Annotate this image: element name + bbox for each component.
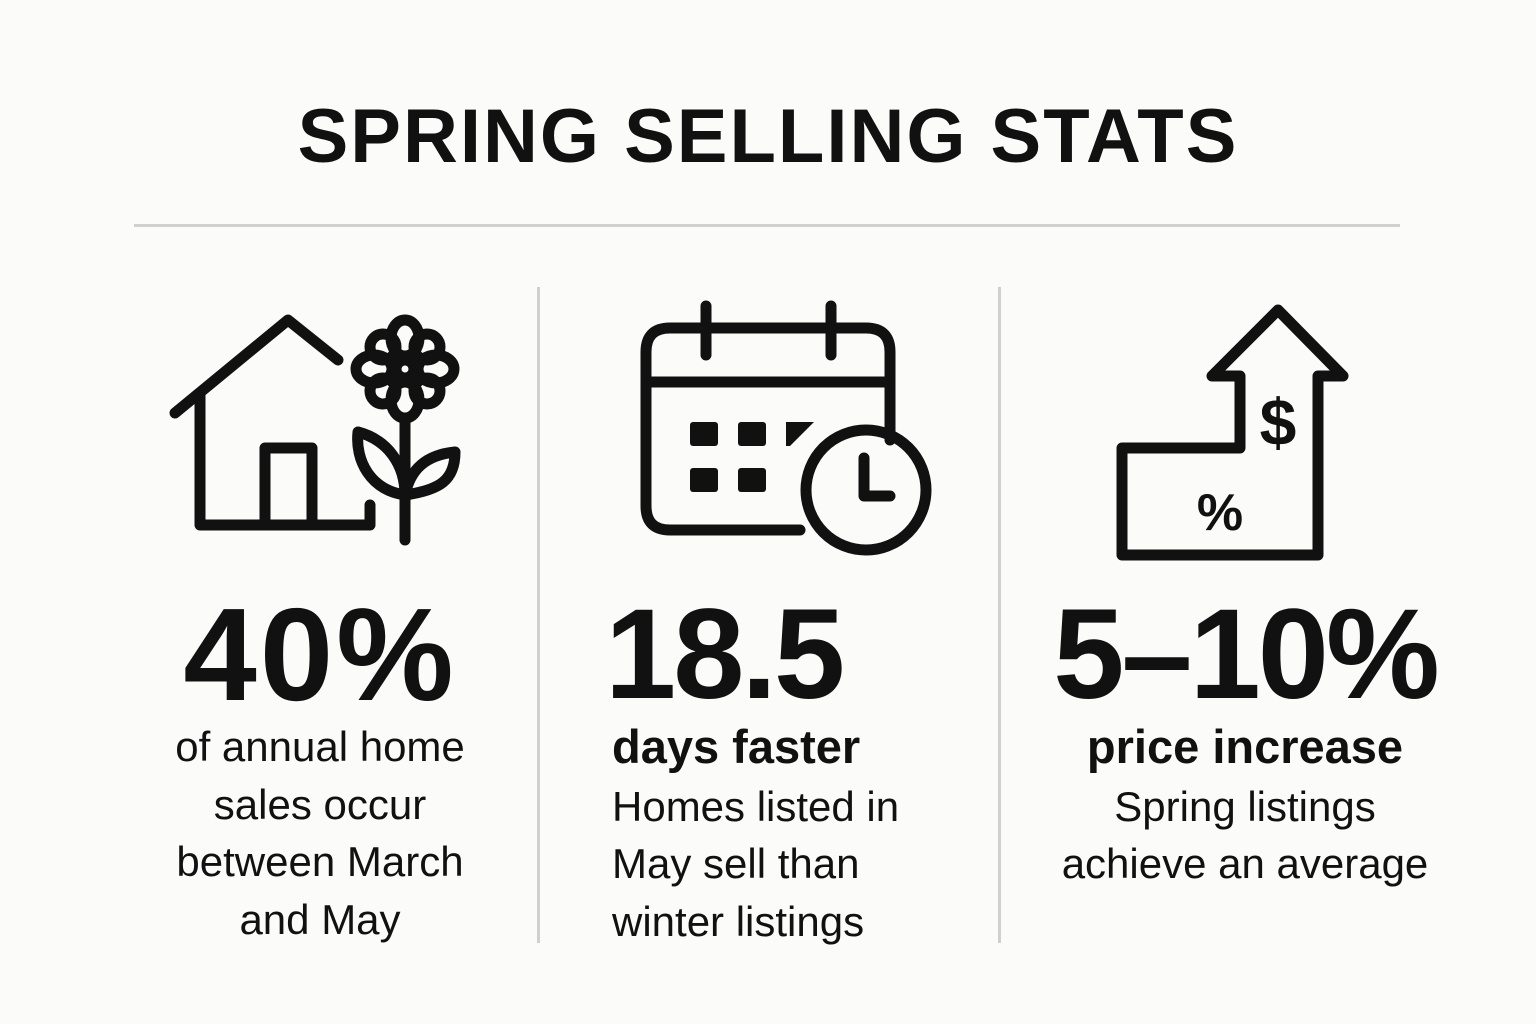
description bbox=[1062, 720, 1428, 887]
stat number: 18.5 bbox=[605, 583, 842, 726]
description: Homes listed in bbox=[612, 782, 899, 830]
description: price increase bbox=[1087, 720, 1403, 773]
description: sales occur bbox=[214, 780, 426, 828]
description: and May bbox=[239, 896, 401, 942]
icon: house with flower bbox=[170, 314, 460, 546]
title: SPRING SELLING STATS bbox=[298, 94, 1238, 179]
description: winter listings bbox=[612, 898, 864, 944]
icon: arrow up with dollar and percent bbox=[1116, 304, 1348, 560]
stat number: 40% bbox=[183, 581, 457, 728]
description bbox=[612, 720, 899, 944]
description: May sell than bbox=[612, 840, 859, 887]
panel: 5-10% bbox=[1053, 304, 1437, 887]
icon: calendar with clock bbox=[640, 300, 932, 556]
description: Spring listings bbox=[1114, 782, 1376, 830]
description: of annual home bbox=[175, 723, 465, 770]
panel: 40% bbox=[170, 314, 465, 942]
description: achieve an average bbox=[1062, 840, 1428, 887]
panel: 18.5 bbox=[605, 300, 932, 944]
icon: arrow up with dollar and percent: % bbox=[1197, 484, 1243, 542]
description bbox=[175, 723, 465, 942]
stat number: 5–10% bbox=[1053, 583, 1437, 726]
icon: arrow up with dollar and percent: $ bbox=[1260, 385, 1296, 459]
description: days faster bbox=[612, 720, 860, 773]
description: between March bbox=[176, 838, 464, 885]
